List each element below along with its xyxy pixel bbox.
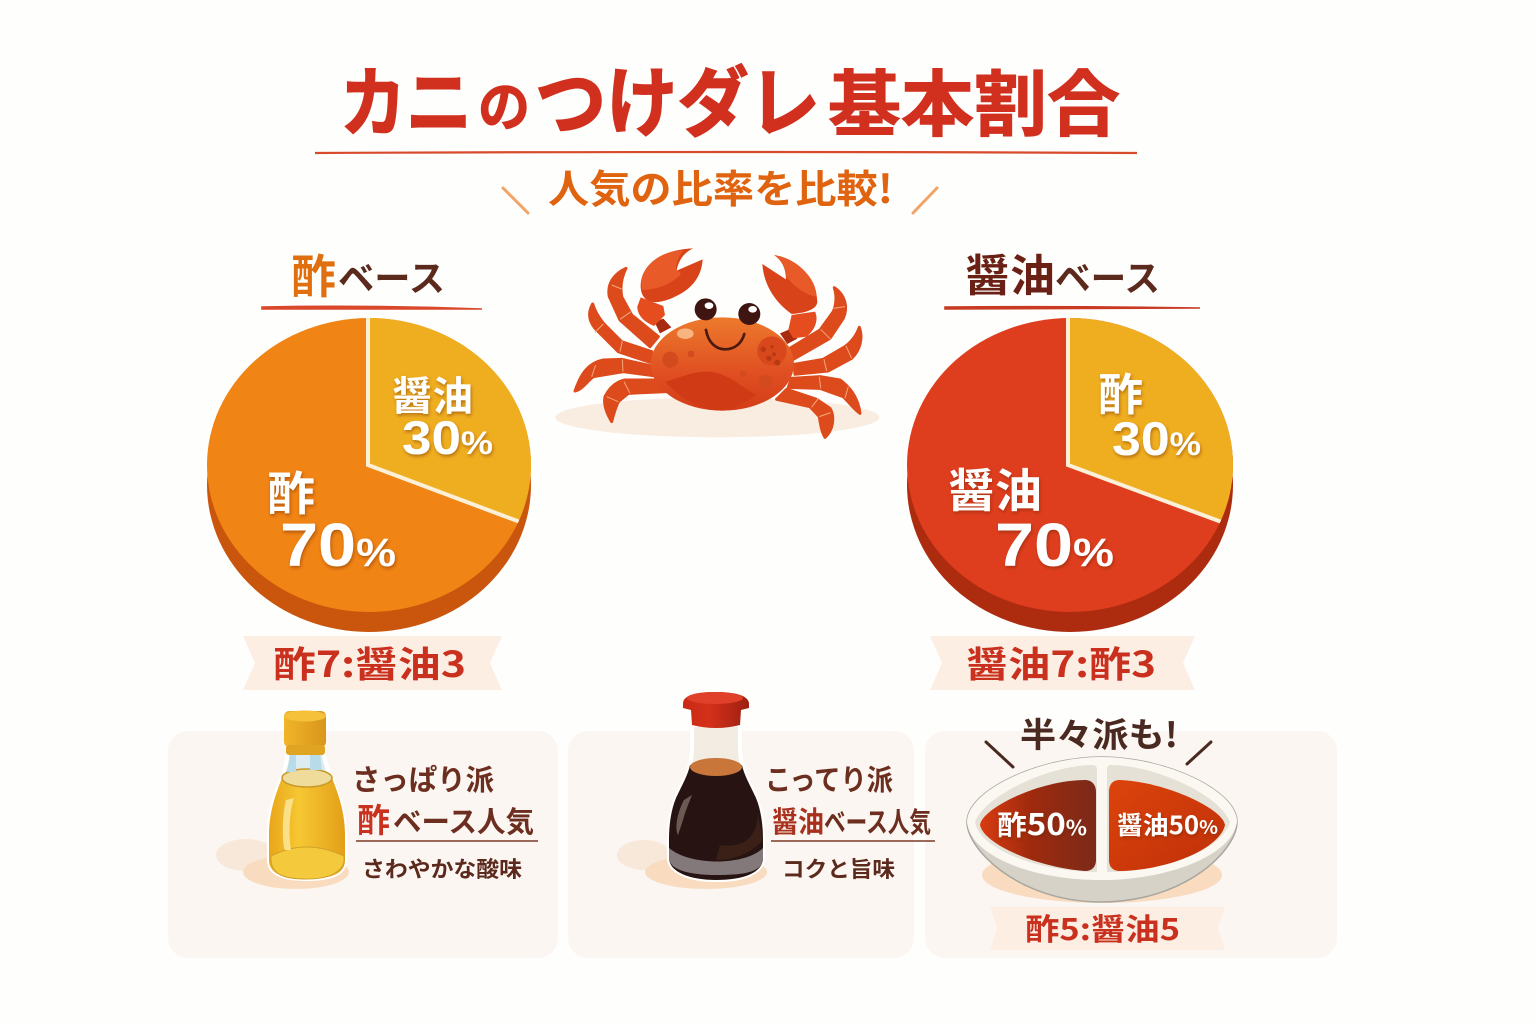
label: soy 70%: 醤油	[948, 455, 1042, 521]
label: soy sauce 30%	[392, 364, 493, 464]
ribbon: vinegar 7 soy 3	[243, 636, 502, 690]
text: refreshing fans	[352, 757, 538, 884]
pie chart: soy base	[907, 318, 1233, 632]
label: vinegar 70%	[267, 458, 396, 579]
heading: half and half	[986, 708, 1211, 767]
text: refreshing fans: ベース人気	[393, 799, 534, 841]
label: vinegar 30%: 酢	[1098, 359, 1143, 423]
pie chart: vinegar base	[207, 318, 531, 632]
slice: soy sauce 30%	[366, 318, 531, 524]
label: vinegar 70%: 酢	[267, 458, 315, 524]
panel: vinegar base heading: ベース	[338, 250, 445, 302]
icon: divided dish	[967, 757, 1237, 903]
text: refreshing fans: さわやかな酸味	[362, 852, 522, 884]
panel: refreshing vinegar fans	[168, 710, 558, 958]
panel: soy base heading: ベース	[1055, 250, 1160, 302]
icon: crab	[555, 248, 879, 437]
slice: vinegar 30%	[1066, 318, 1233, 524]
heading: half and half: 半々派も!	[1020, 708, 1178, 757]
panel: soy base heading: 醤油	[965, 240, 1055, 304]
icon: soy sauce bottle	[617, 692, 767, 889]
panel: soy base heading	[945, 240, 1200, 309]
label: soy sauce 30%: 醤油	[392, 364, 473, 422]
text: refreshing fans: さっぱり派	[352, 757, 494, 799]
subtitle: 人気の比率を比較!	[548, 159, 893, 215]
panel: half and half	[925, 708, 1337, 958]
ribbon: vinegar 7 soy 3: 酢7:醤油3	[273, 636, 466, 688]
text: rich fans: コクと旨味	[782, 852, 895, 884]
title	[315, 42, 1137, 153]
panel: vinegar base heading: 酢	[291, 241, 336, 307]
label: vinegar 50%: 酢50%	[997, 800, 1087, 844]
label: soy 70%: 70 %	[995, 511, 1114, 579]
title: つけダレ	[535, 42, 820, 152]
text: refreshing fans: 酢	[357, 794, 390, 842]
text: rich fans: 醤油	[772, 799, 824, 841]
text: rich fans: ベース人気	[824, 801, 931, 841]
label: soy 70%	[948, 455, 1114, 579]
text: rich fans: こってり派	[765, 757, 893, 799]
sauce: vinegar	[980, 780, 1096, 871]
ribbon: vinegar 5 soy 5	[990, 905, 1225, 950]
icon: vinegar bottle	[216, 710, 349, 889]
label: vinegar 70%: 70%	[280, 511, 396, 579]
panel: vinegar base heading	[262, 241, 482, 309]
title: の	[478, 63, 530, 142]
title: 基本割合	[828, 46, 1120, 151]
label: vinegar 30%	[1098, 359, 1201, 465]
ribbon: soy 7 vinegar 3	[930, 636, 1195, 690]
label: vinegar 30%: 30%	[1112, 412, 1201, 465]
title: カニ	[340, 42, 472, 152]
label: soy sauce 30%: 30%	[402, 411, 493, 464]
label: soy 50%: 醤油50%	[1117, 806, 1218, 842]
panel: rich soy fans	[568, 692, 935, 958]
ribbon: vinegar 5 soy 5: 酢5:醤油5	[1025, 905, 1180, 949]
text: rich fans	[765, 757, 935, 884]
ribbon: soy 7 vinegar 3: 醤油7:酢3	[966, 636, 1156, 688]
sauce: soy	[1109, 780, 1225, 871]
